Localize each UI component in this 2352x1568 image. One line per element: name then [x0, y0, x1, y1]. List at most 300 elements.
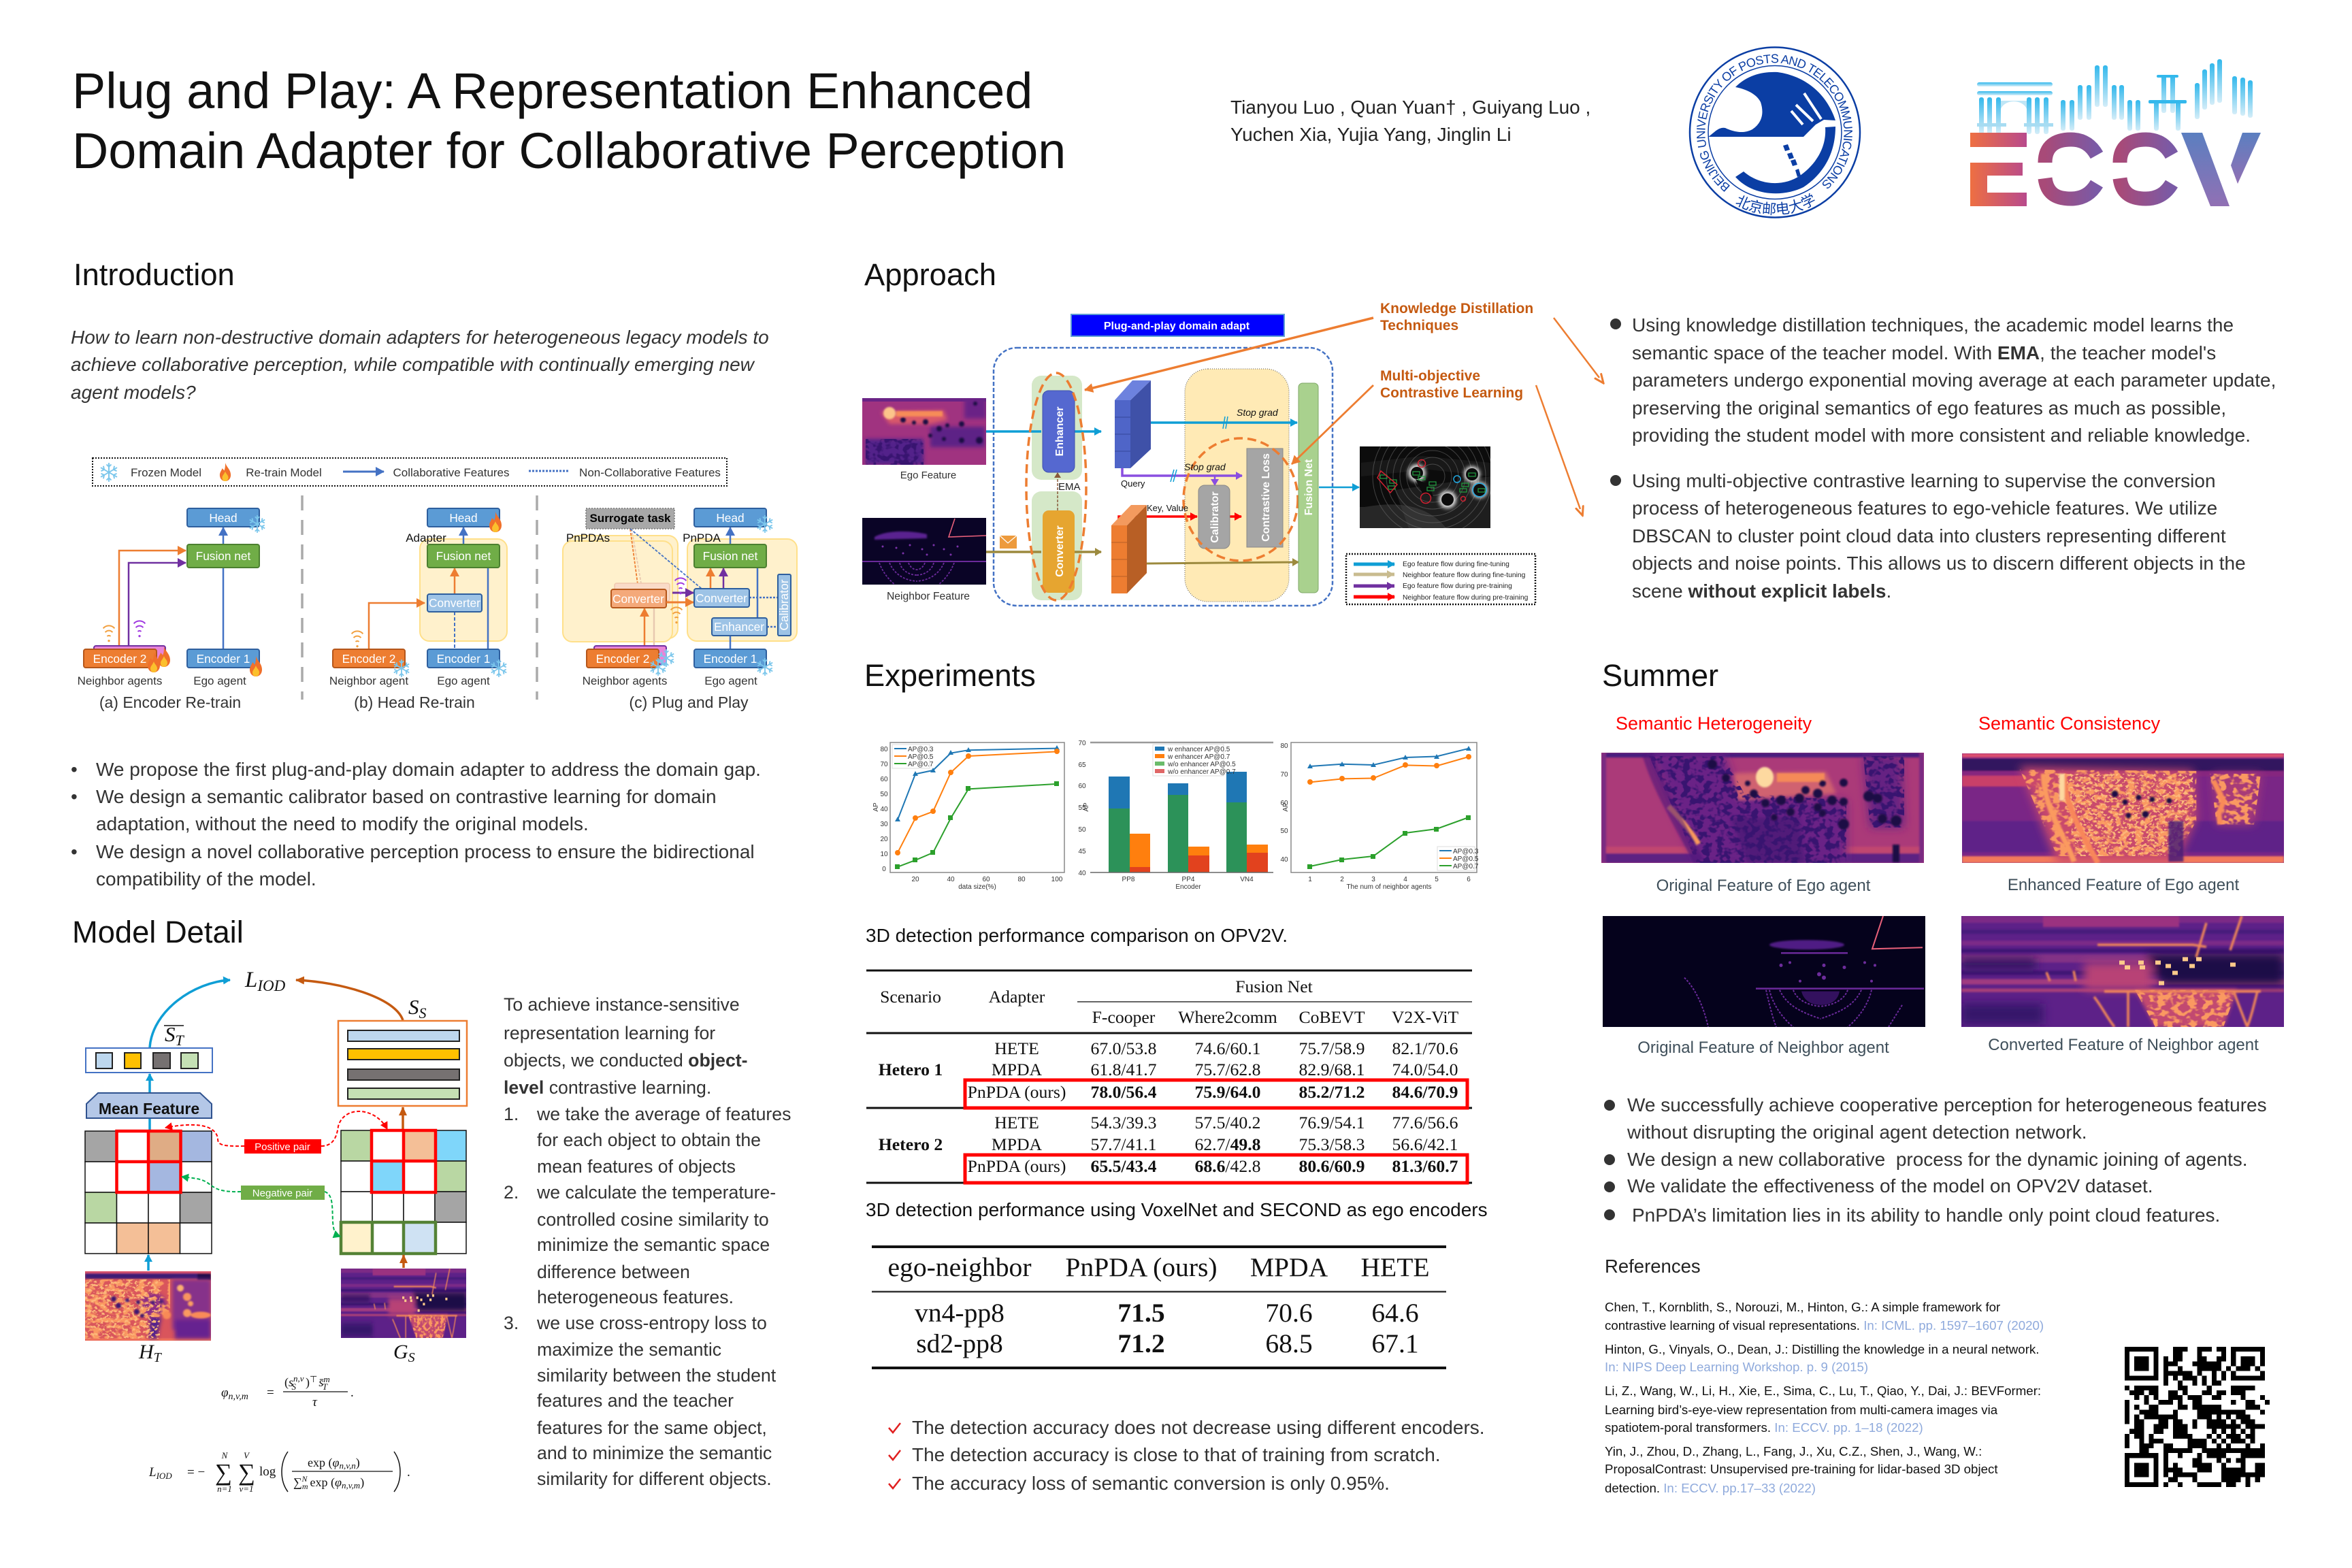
- detection result: [1360, 416, 1492, 536]
- callout: knowledge distillation: Techniques: [1380, 318, 1458, 333]
- table: encoder results: ego-neighbor: [887, 1252, 1032, 1282]
- equation: loss: n=1: [217, 1484, 232, 1494]
- intro question: achieve collaborative perception, while compatible with continually emerging new: [71, 354, 755, 375]
- equation: loss: ): [356, 1456, 360, 1470]
- approach bullets: objects and noise points. This allows us to discern different objects in the: [1632, 553, 2246, 574]
- chart: AP vs data size: data size(%): [958, 883, 996, 891]
- table: OPV2V results: 57.5/40.2: [1194, 1113, 1261, 1132]
- equation: loss: ∑: [238, 1459, 255, 1486]
- equation: similarity: =: [267, 1386, 274, 1400]
- query tensor: [1115, 380, 1151, 468]
- chart: AP vs neighbor agents: AP@0.7: [1453, 863, 1479, 870]
- chart: AP vs neighbor agents: 1: [1308, 876, 1312, 883]
- model detail text: level contrastive learning.: [504, 1077, 711, 1098]
- chart: AP vs neighbor agents: 3: [1371, 876, 1375, 883]
- intro question: How to learn non-destructive domain adapters for heterogeneous legacy models to: [71, 327, 769, 348]
- negative pair tag: Negative pair: [252, 1188, 312, 1199]
- table: OPV2V results: HETE: [994, 1113, 1039, 1132]
- intro bullets: •: [71, 841, 78, 862]
- chart: AP vs neighbor agents: 50: [1280, 828, 1288, 835]
- table: encoder results: 64.6: [1371, 1298, 1419, 1328]
- model detail text: representation learning for: [504, 1023, 715, 1043]
- intro bullets: We design a semantic calibrator based on contrastive learning for domain: [96, 786, 717, 807]
- intro bullets: [71, 759, 761, 889]
- equation: similarity: φ: [221, 1386, 229, 1400]
- intro bullets: compatibility of the model.: [96, 868, 316, 889]
- references list: spatiotem-poral transformers. In: ECCV. pp. 1–18 (2022): [1605, 1420, 1923, 1435]
- table: OPV2V results: 65.5/43.4: [1090, 1156, 1157, 1176]
- model detail text: 3.: [504, 1313, 519, 1333]
- equation: loss: [148, 1450, 410, 1494]
- calibrator: Calibrator: [1209, 491, 1221, 543]
- small labels: Query: [1121, 478, 1145, 489]
- label: L_IOD: IOD: [257, 977, 286, 994]
- authors: Tianyou Luo , Quan Yuan† , Guiyang Luo ,: [1230, 97, 1590, 118]
- panel: encoder re-train: Neighbor agents: [78, 674, 162, 687]
- title: Domain Adapter for Collaborative Perception: [72, 122, 1066, 179]
- intro bullets: •: [71, 786, 78, 807]
- heading: Approach: Approach: [864, 257, 996, 292]
- references list: ProposalContrast: Unsupervised pre-training for lidar-based 3D object: [1605, 1462, 1998, 1476]
- calibrator: [1198, 485, 1230, 549]
- key value tensor: [1111, 505, 1147, 593]
- fusion net: Fusion Net: [1303, 459, 1315, 515]
- panel: head re-train: Ego agent: [437, 674, 490, 687]
- table: encoder results: vn4-pp8: [915, 1298, 1004, 1328]
- letter icon: [1000, 536, 1017, 549]
- panel: plug and play: Enhancer: [714, 620, 764, 634]
- table: OPV2V results: 78.0/56.4: [1090, 1082, 1157, 1102]
- contrastive loss: Contrastive Loss: [1260, 453, 1272, 542]
- table: OPV2V results: 82.1/70.6: [1392, 1039, 1458, 1058]
- chart: AP vs neighbor agents: AP: [1282, 802, 1290, 812]
- small labels: Stop grad: [1237, 407, 1279, 418]
- logo: BUPT: BEIJING UNIVERSITY OF POSTS AND TELECOMMUNICATIONS: [1696, 54, 1852, 192]
- model detail text: objects, we conducted object-: [504, 1050, 748, 1071]
- references list: Chen, T., Kornblith, S., Norouzi, M., Hinton, G.: A simple framework for: [1605, 1300, 2000, 1314]
- table: OPV2V results: 77.6/56.6: [1392, 1113, 1458, 1132]
- table: OPV2V results: Scenario: [880, 987, 941, 1007]
- table: OPV2V results: Hetero 2: [879, 1134, 943, 1154]
- references list: Hinton, G., Vinyals, O., Dean, J.: Distilling the knowledge in a neural network.: [1605, 1342, 2039, 1356]
- title: [72, 63, 1066, 179]
- calibration zone: [1185, 369, 1289, 602]
- chart: enhancer bars: w enhancer AP@0.7: [1167, 753, 1230, 761]
- panel: plug and play: Surrogate task: [589, 512, 671, 525]
- panel: enhanced ego: Enhanced Feature of Ego agent: [2008, 876, 2239, 894]
- approach bullets: parameters undergo exponential moving average at each parameter update,: [1632, 370, 2276, 391]
- table: OPV2V results: PnPDA (ours): [968, 1156, 1066, 1176]
- chart: AP vs data size: 40: [947, 876, 955, 883]
- equation: loss: ∑: [215, 1459, 232, 1486]
- label H_T: H: [139, 1341, 154, 1363]
- figure: three training strategies: [78, 495, 797, 711]
- table: OPV2V results: 57.7/41.1: [1090, 1134, 1157, 1154]
- model detail text: heterogeneous features.: [537, 1287, 734, 1307]
- title bar: [1071, 314, 1284, 336]
- approach bullets: providing the student model with more consistent and reliable knowledge.: [1632, 425, 2251, 446]
- table: OPV2V results: 62.7/49.8: [1194, 1134, 1261, 1154]
- model detail text: features for the same object,: [537, 1418, 767, 1438]
- label: S_S: S: [419, 1004, 426, 1022]
- table: OPV2V results: MPDA: [992, 1060, 1043, 1079]
- equation: similarity: m: [323, 1374, 330, 1384]
- table: encoder results: 71.2: [1117, 1328, 1165, 1358]
- equation: similarity: ⊤: [310, 1374, 317, 1384]
- chart: AP vs data size: 80: [1017, 876, 1026, 883]
- chart: AP vs data size: 20: [911, 876, 919, 883]
- chart: enhancer bars: PP4: [1182, 876, 1195, 883]
- figure: contrastive pipeline: [85, 968, 467, 1365]
- callout: contrastive learning: Multi-objective: [1380, 368, 1480, 384]
- chart: enhancer bars: AP: [1083, 802, 1090, 812]
- equation: similarity: .: [350, 1386, 354, 1400]
- equation: loss: n,v,m: [342, 1480, 360, 1490]
- references list: Li, Z., Wang, W., Li, H., Xie, E., Sima, C., Lu, T., Qiao, Y., Dai, J.: BEVFormer:: [1605, 1384, 2041, 1398]
- equation: loss: ): [360, 1475, 364, 1490]
- chart: enhancer bars: 60: [1078, 783, 1086, 790]
- table: OPV2V results: 85.2/71.2: [1298, 1082, 1365, 1102]
- chart: enhancer bars: [1078, 740, 1273, 891]
- panel: encoder re-train: Head: [209, 511, 238, 525]
- heading: Experiments: Experiments: [864, 658, 1036, 693]
- equation: similarity: n,v,m: [229, 1392, 248, 1402]
- model detail text: we use cross-entropy loss to: [536, 1313, 767, 1333]
- label: S_T: [164, 1022, 185, 1049]
- panel: plug and play: Head: [716, 511, 745, 525]
- mean feature block: [86, 1093, 212, 1118]
- references list: detection. In: ECCV. pp.17–33 (2022): [1605, 1481, 1816, 1495]
- label G_S: G: [393, 1341, 408, 1363]
- table: OPV2V results: CoBEVT: [1298, 1007, 1365, 1027]
- flow legend: Ego feature flow during fine-tuning: [1403, 561, 1509, 568]
- chart: AP vs neighbor agents: AP@0.5: [1453, 855, 1479, 863]
- table: OPV2V results: Where2comm: [1178, 1007, 1277, 1027]
- panel: plug and play: Calibrator: [777, 579, 791, 630]
- table: OPV2V results: 75.3/58.3: [1298, 1134, 1365, 1154]
- chart: AP vs neighbor agents: [1280, 742, 1479, 891]
- panel: head re-train: Adapter: [406, 532, 446, 544]
- chart: AP vs data size: 10: [880, 851, 888, 858]
- approach bullets: scene without explicit labels.: [1632, 581, 1891, 602]
- heading: Model Detail: Model Detail: [72, 915, 244, 949]
- table: OPV2V results: 84.6/70.9: [1392, 1082, 1458, 1102]
- checklist: The detection accuracy does not decrease using different encoders.: [912, 1417, 1485, 1438]
- table: OPV2V results: Hetero 1: [879, 1060, 943, 1079]
- approach bullets: process of heterogeneous features to ego-vehicle features. We utilize: [1632, 497, 2217, 519]
- model detail text: we take the average of features: [536, 1104, 791, 1124]
- panel: head re-train: (b) Head Re-train: [354, 693, 475, 711]
- table: OPV2V results: 81.3/60.7: [1392, 1156, 1458, 1176]
- chart: enhancer bars: 40: [1078, 870, 1086, 877]
- table: OPV2V results: 74.6/60.1: [1194, 1039, 1261, 1058]
- student grid: [341, 1130, 466, 1254]
- arrow: to loss from student: [296, 980, 403, 1020]
- table: OPV2V results: F-cooper: [1092, 1007, 1156, 1027]
- table: OPV2V results: 75.9/64.0: [1194, 1082, 1261, 1102]
- table: encoder results: HETE: [1360, 1252, 1430, 1282]
- equation: similarity: S: [292, 1382, 297, 1392]
- label: S_T: S: [165, 1022, 176, 1046]
- table: OPV2V results: 76.9/54.1: [1298, 1113, 1365, 1132]
- panel: plug and play: Converter: [612, 592, 664, 606]
- intro bullets: We design a novel collaborative perception process to ensure the bidirectional: [96, 841, 755, 862]
- table: OPV2V results: MPDA: [992, 1134, 1043, 1154]
- enhancer: Enhancer: [1054, 407, 1066, 456]
- intro legend: Frozen Model: [131, 466, 201, 479]
- model detail text: 2.: [504, 1182, 519, 1203]
- arrow: to first approach bullet: [1554, 318, 1599, 378]
- intro bullets: We propose the first plug-and-play domain adapter to address the domain gap.: [96, 759, 761, 780]
- table: OPV2V results: 54.3/39.3: [1090, 1113, 1157, 1132]
- chart: AP vs data size: 0: [882, 866, 886, 873]
- authors: Yuchen Xia, Yujia Yang, Jinglin Li: [1230, 124, 1512, 145]
- equation: loss: v=1: [239, 1484, 254, 1494]
- teacher grid: [85, 1131, 212, 1254]
- table: OPV2V results: 67.0/53.8: [1090, 1039, 1157, 1058]
- chart: AP vs neighbor agents: 60: [1280, 800, 1288, 807]
- panel: head re-train: Converter: [429, 596, 480, 610]
- small labels: Stop grad: [1184, 461, 1226, 472]
- chart: AP vs neighbor agents: The num of neighbor agents: [1346, 883, 1432, 891]
- table: OPV2V results: 74.0/54.0: [1392, 1060, 1458, 1079]
- approach bullets: preserving the original semantics of ego features as much as possible,: [1632, 397, 2226, 419]
- arrow: to loss from teacher: [150, 980, 230, 1047]
- panel: head re-train: Fusion net: [436, 549, 491, 563]
- label: S_T: T: [176, 1032, 185, 1049]
- chart: AP vs data size: AP@0.7: [908, 761, 934, 768]
- equation: loss: V: [244, 1450, 250, 1460]
- logo: BUPT: 北京邮电大学: [1735, 193, 1815, 215]
- table: OPV2V results: 56.6/42.1: [1392, 1134, 1458, 1154]
- table: OPV2V results: HETE: [994, 1039, 1039, 1058]
- callout: contrastive learning: Contrastive Learning: [1380, 385, 1523, 401]
- summer bullets: We design a new collaborative process for the dynamic joining of agents.: [1627, 1149, 2248, 1170]
- student features: [338, 1021, 467, 1106]
- table: OPV2V results: 75.7/62.8: [1194, 1060, 1261, 1079]
- references list: Learning bird’s-eye-view representation from multi-camera images via: [1605, 1403, 1998, 1417]
- ego feature: Ego Feature: [900, 470, 956, 481]
- equation: loss: N: [221, 1450, 229, 1460]
- dashed ellipse: knowledge distillation: [1026, 373, 1086, 600]
- chart: AP vs neighbor agents: 4: [1403, 876, 1407, 883]
- table: encoder results: 68.5: [1265, 1328, 1313, 1358]
- chart: AP vs data size: 70: [880, 761, 888, 768]
- intro legend: Non-Collaborative Features: [579, 466, 721, 479]
- heading: Summer: Summer: [1602, 658, 1718, 693]
- panel: original ego: [1601, 753, 1924, 895]
- module backgrounds: [1032, 376, 1082, 600]
- chart: enhancer bars: PP8: [1122, 876, 1135, 883]
- chart: AP vs neighbor agents: 80: [1280, 742, 1288, 750]
- equation: loss: ∑: [293, 1475, 302, 1489]
- approach bullets: semantic space of the teacher model. With EMA, the teacher model's: [1632, 342, 2216, 363]
- equation: loss: m: [302, 1482, 308, 1491]
- label H_T: T: [154, 1350, 163, 1365]
- negative pair tag: [182, 1177, 340, 1237]
- panel: head re-train: Encoder 1: [437, 652, 490, 666]
- model detail text: for each object to obtain the: [537, 1130, 761, 1150]
- label G_S: S: [408, 1350, 415, 1365]
- equation: loss: .: [407, 1465, 410, 1480]
- equation: similarity: n,v: [293, 1373, 304, 1384]
- chart: AP vs neighbor agents: 6: [1467, 876, 1471, 883]
- equation: loss: φ: [335, 1475, 342, 1489]
- caption: encoder table: 3D detection performance using VoxelNet and SECOND as ego encoders: [866, 1199, 1488, 1220]
- intro legend: [93, 458, 727, 486]
- model detail text: and to minimize the semantic: [537, 1443, 772, 1463]
- flow legend: Neighbor feature flow during fine-tuning: [1403, 572, 1526, 579]
- flows: [986, 416, 1359, 564]
- model detail text: similarity for different objects.: [537, 1469, 772, 1489]
- model detail text: mean features of objects: [537, 1156, 736, 1177]
- chart: AP vs data size: 60: [880, 776, 888, 783]
- equation: loss: exp (: [310, 1475, 335, 1490]
- flow legend: [1346, 554, 1535, 604]
- converter: [1043, 510, 1075, 593]
- intro legend: Re-train Model: [246, 466, 322, 479]
- label: S_S: S: [408, 995, 419, 1019]
- enhancer: [1043, 391, 1075, 472]
- table: OPV2V results: 68.6/42.8: [1194, 1156, 1261, 1176]
- chart: enhancer bars: w enhancer AP@0.5: [1167, 746, 1230, 753]
- chart: AP vs data size: 20: [880, 836, 888, 843]
- chart: enhancer bars: Encoder: [1175, 883, 1201, 891]
- panel: original neighbor: [1603, 916, 1925, 1057]
- panel: plug and play: Converter: [696, 591, 747, 605]
- chart: AP vs neighbor agents: AP@0.3: [1453, 848, 1479, 855]
- table: OPV2V results: 80.6/60.9: [1298, 1156, 1365, 1176]
- outer dashed frame: [994, 348, 1333, 606]
- equation: loss: = −: [187, 1465, 205, 1480]
- callout: knowledge distillation: Knowledge Distillation: [1380, 301, 1533, 316]
- panel: encoder re-train: Ego agent: [193, 674, 246, 687]
- table: encoder results: 70.6: [1265, 1298, 1313, 1328]
- small labels: Key, Value: [1147, 503, 1188, 513]
- dashed circle: contrastive learning: [1183, 438, 1298, 561]
- table: OPV2V results: Adapter: [989, 987, 1045, 1007]
- chart: AP vs data size: AP@0.3: [908, 746, 934, 753]
- chart: enhancer bars: 70: [1078, 740, 1086, 747]
- model detail text: features and the teacher: [537, 1390, 734, 1411]
- flow legend: Neighbor feature flow during pre-training: [1403, 594, 1529, 602]
- callout: contrastive learning: [1292, 368, 1523, 464]
- approach bullets: [1610, 314, 2276, 602]
- QR code: [2125, 1350, 2270, 1484]
- chart: AP vs data size: 100: [1051, 876, 1063, 883]
- table: encoder results: 71.5: [1117, 1298, 1165, 1328]
- equation: similarity: [221, 1373, 354, 1409]
- ego feature: [862, 398, 986, 481]
- model detail text: maximize the semantic: [537, 1339, 721, 1360]
- equation: loss: log: [259, 1465, 276, 1479]
- intro question: [71, 327, 769, 403]
- chart: AP vs data size: AP@0.5: [908, 753, 934, 761]
- model detail text: 1.: [504, 1104, 519, 1124]
- panel: head re-train: Encoder 2: [342, 652, 395, 666]
- panel: plug and play: PnPDAs: [566, 532, 610, 544]
- panel: original neighbor: Original Feature of Neighbor agent: [1637, 1039, 1889, 1057]
- approach bullets: DBSCAN to cluster point cloud data into clusters representing different: [1632, 525, 2226, 546]
- equation: similarity: T: [323, 1382, 328, 1392]
- label: L_IOD: L: [245, 968, 257, 992]
- panel: plug and play: [563, 508, 797, 711]
- references list: Yin, J., Zhou, D., Zhang, L., Fang, J., Xu, C.Z., Shen, J., Wang, W.:: [1605, 1444, 1982, 1458]
- summer bullets: We validate the effectiveness of the model on OPV2V dataset.: [1627, 1175, 2153, 1196]
- chart: AP vs data size: [872, 742, 1064, 891]
- equation: loss: L: [149, 1465, 157, 1480]
- panel: plug and play: Encoder 1: [704, 652, 757, 666]
- chart: enhancer bars: VN4: [1240, 876, 1254, 883]
- checklist: The detection accuracy is close to that of training from scratch.: [912, 1444, 1441, 1465]
- table: OPV2V results: V2X-ViT: [1392, 1007, 1458, 1027]
- chart: AP vs data size: 80: [880, 746, 888, 753]
- model detail text: similarity between the student: [537, 1365, 777, 1386]
- contrastive loss: [1247, 448, 1283, 547]
- table: OPV2V results: [866, 970, 1472, 1183]
- panel: encoder re-train: Encoder 2: [93, 652, 146, 666]
- table: encoder results: MPDA: [1250, 1252, 1328, 1282]
- equation: loss: exp (φ: [308, 1456, 339, 1469]
- arrow: to second approach bullet: [1536, 385, 1580, 509]
- panel: enhanced ego: [1962, 753, 2284, 894]
- equation: loss: n,v,n: [339, 1460, 356, 1471]
- model detail text: To achieve instance-sensitive: [504, 994, 740, 1015]
- figure: approach architecture: [862, 301, 1599, 606]
- heading: Introduction: Introduction: [74, 257, 235, 292]
- neighbor feature: Neighbor Feature: [887, 591, 970, 602]
- chart: enhancer bars: w/o enhancer AP@0.7: [1167, 768, 1236, 776]
- summer bullets: PnPDA’s limitation lies in its ability to handle only point cloud features.: [1632, 1205, 2220, 1226]
- converter: Converter: [1054, 525, 1066, 577]
- title bar: Plug-and-play domain adapt: [1104, 321, 1250, 332]
- panel: head re-train: [329, 508, 507, 711]
- table: encoder results: 67.1: [1371, 1328, 1419, 1358]
- table: OPV2V results: 61.8/41.7: [1090, 1060, 1157, 1079]
- teacher mean vector: [86, 1048, 212, 1073]
- panel: encoder re-train: Encoder 1: [197, 652, 250, 666]
- checklist: [889, 1417, 1485, 1494]
- equation: loss: N: [301, 1474, 308, 1484]
- positive pair tag: Positive pair: [255, 1141, 310, 1153]
- authors: [1230, 97, 1590, 145]
- equation: similarity: ): [306, 1375, 310, 1390]
- table: OPV2V results: PnPDA (ours): [968, 1082, 1066, 1102]
- highlight boxes: [965, 1080, 1467, 1183]
- panel: converted neighbor: [1961, 916, 2284, 1054]
- summer heading: consistency: Semantic Consistency: [1978, 713, 2161, 734]
- panel: converted neighbor: Converted Feature of Neighbor agent: [1988, 1036, 2259, 1054]
- chart: AP vs neighbor agents: 40: [1280, 856, 1288, 864]
- model detail text: controlled cosine similarity to: [537, 1209, 769, 1230]
- heatmap H_T: [85, 1271, 211, 1341]
- panel: plug and play: Fusion net: [703, 549, 758, 563]
- references list: contrastive learning of visual representations. In: ICML. pp. 1597–1607 (2020): [1605, 1318, 2044, 1333]
- approach bullets: Using multi-objective contrastive learning to supervise the conversion: [1632, 470, 2216, 491]
- table: OPV2V results: 82.9/68.1: [1298, 1060, 1365, 1079]
- logo: ECCV: [1970, 59, 2261, 206]
- positive pair tag: [165, 1111, 387, 1154]
- intro question: agent models?: [71, 382, 196, 403]
- neighbor feature: [862, 518, 986, 602]
- equation: similarity: s̄: [318, 1375, 324, 1389]
- callout: knowledge distillation: [1085, 301, 1533, 390]
- panel: original ego: Original Feature of Ego agent: [1656, 877, 1871, 895]
- chart: enhancer bars: w/o enhancer AP@0.5: [1167, 761, 1236, 768]
- table: OPV2V results: 75.7/58.9: [1298, 1039, 1365, 1058]
- chart: enhancer bars: 50: [1078, 826, 1086, 834]
- caption: OPV2V table: 3D detection performance comparison on OPV2V.: [866, 925, 1288, 946]
